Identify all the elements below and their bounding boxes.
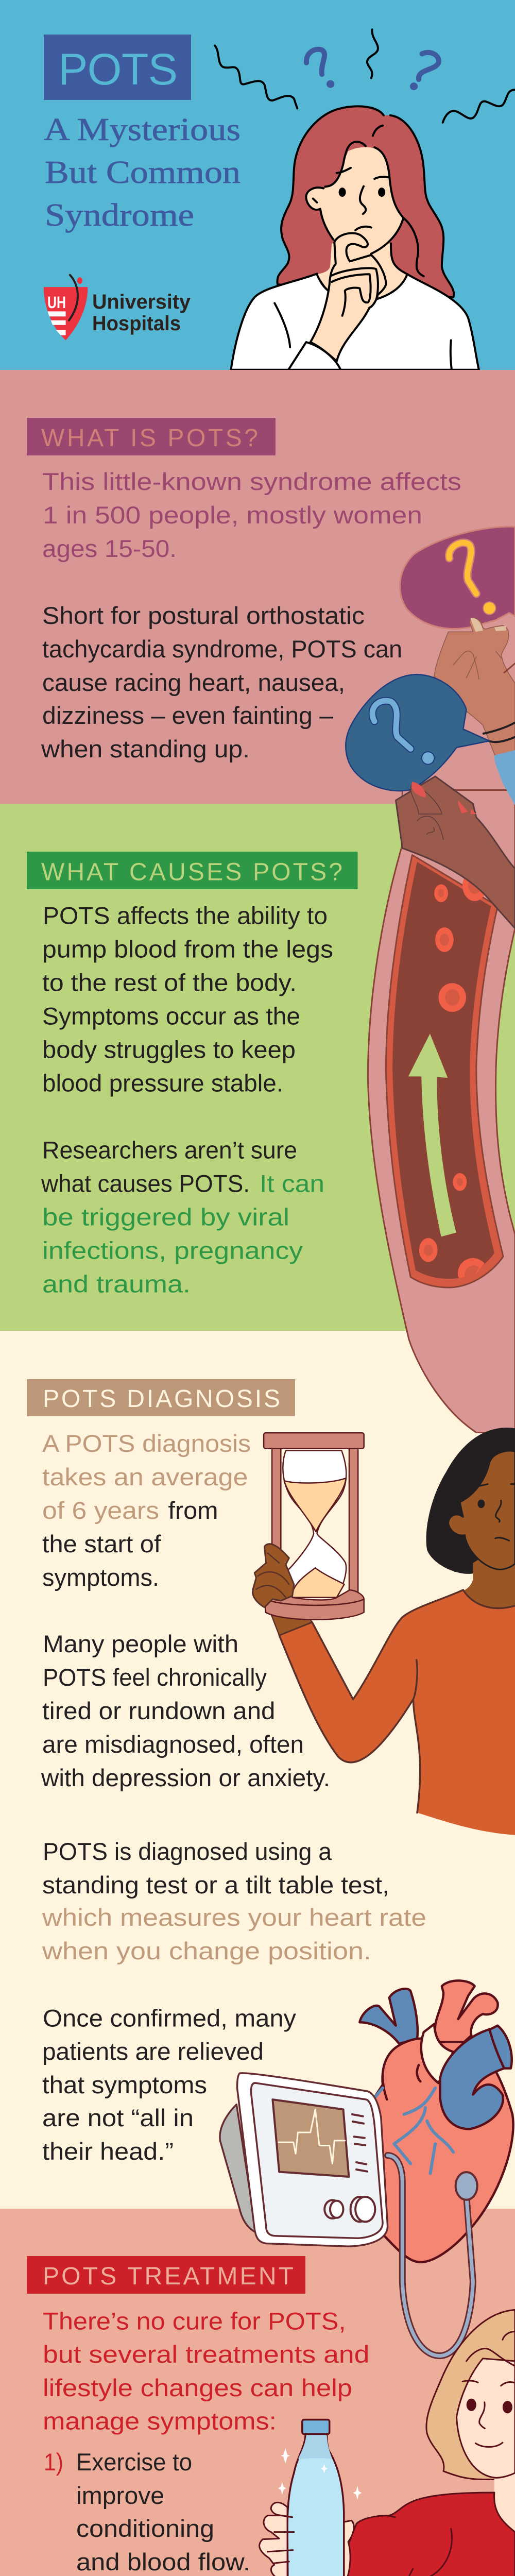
text block: relief after confirmation: patients are relieved (42, 2038, 264, 2065)
text block: what is POTS definition: dizziness – even fainting – (42, 702, 334, 729)
text block: what causes POTS explanation: pump blood from the legs (42, 936, 333, 962)
text block: average time to diagnosis: takes an average (42, 1463, 248, 1490)
text block: relief after confirmation: are not “all in (42, 2104, 194, 2131)
text block: what causes POTS explanation: Researchers aren’t sure (42, 1137, 297, 1163)
text block: misdiagnosis: POTS feel chronically (43, 1664, 267, 1691)
text block: what causes POTS explanation: what causes POTS. (41, 1170, 250, 1197)
text block: how POTS is tested: POTS is diagnosed using a (43, 1838, 332, 1865)
text block: average time to diagnosis: the start of (42, 1530, 161, 1557)
illustration: blood vessel with arrow (368, 776, 515, 1432)
text block: what is POTS intro: ages 15-50. (42, 535, 177, 562)
text block: average time to diagnosis: of 6 years (42, 1497, 159, 1524)
text block: misdiagnosis: are misdiagnosed, often (42, 1731, 304, 1758)
text block: misdiagnosis: Many people with (43, 1630, 238, 1657)
text block: how POTS is tested: when you change position. (42, 1937, 371, 1964)
title block: POTS (58, 45, 178, 94)
title block: But Common (45, 155, 241, 190)
text block: relief after confirmation: that symptoms (42, 2071, 207, 2098)
text block: what is POTS definition (41, 602, 402, 762)
heading: what causes POTS (27, 852, 357, 889)
text block: average time to diagnosis: from (168, 1497, 218, 1524)
panel background: POTS treatment (0, 2209, 515, 2576)
panel background: what is POTS (0, 370, 515, 804)
illustration: confused woman with question marks (215, 29, 515, 370)
heading: POTS treatment (27, 2256, 305, 2294)
text block: what causes POTS explanation: to the rest of the body. (42, 969, 297, 996)
list item 1: exercise: improve (76, 2482, 164, 2509)
logo: University Hospitals: University (92, 291, 191, 313)
illustration: woman holding hourglass (252, 1428, 515, 1835)
text block: how POTS is tested (42, 1838, 426, 1964)
text block: treatment intro: There’s no cure for POTS, (43, 2307, 346, 2335)
logo: University Hospitals: Hospitals (92, 312, 181, 335)
list item 1: exercise: and blood flow. (76, 2548, 250, 2575)
text block: relief after confirmation (42, 2004, 297, 2165)
title block: A Mysterious (44, 112, 241, 147)
text block: what causes POTS explanation: blood pressure stable. (42, 1070, 283, 1096)
title block: Syndrome (45, 198, 194, 233)
text block: what is POTS definition: tachycardia syndrome, POTS can (42, 635, 402, 663)
text block: POTS triggers (42, 1170, 324, 1297)
text block: what is POTS intro (42, 468, 461, 562)
text block: POTS triggers: and trauma. (42, 1270, 191, 1297)
text block: what is POTS definition: Short for postural orthostatic (42, 602, 365, 629)
list item 1: exercise: conditioning (76, 2515, 214, 2542)
text block: misdiagnosis: with depression or anxiety. (41, 1764, 330, 1791)
panel background: POTS diagnosis (0, 1331, 515, 2209)
text block: relief after confirmation: Once confirmed, many (43, 2004, 297, 2032)
list item 1: exercise: Exercise to (76, 2448, 192, 2476)
heading: POTS diagnosis: POTS DIAGNOSIS (43, 1385, 282, 1413)
logo: University Hospitals: UH (47, 293, 66, 312)
text block: treatment intro: but several treatments and (43, 2341, 370, 2368)
illustration: hands holding question mark speech bubbles (346, 527, 515, 814)
text block: treatment intro (43, 2307, 370, 2435)
text block: treatment intro: lifestyle changes can help (43, 2374, 352, 2401)
text block: POTS triggers: infections, pregnancy (42, 1236, 303, 1264)
logo: University Hospitals (44, 275, 191, 341)
text block: what is POTS intro: 1 in 500 people, mostly women (43, 501, 422, 529)
text block: POTS triggers: be triggered by viral (42, 1204, 289, 1230)
heading: what is POTS: WHAT IS POTS? (41, 425, 260, 452)
text block: misdiagnosis: tired or rundown and (42, 1697, 275, 1724)
text block: average time to diagnosis: symptoms. (42, 1564, 159, 1591)
text block: average time to diagnosis: A POTS diagnosis (42, 1430, 251, 1457)
illustration: woman holding water bottle (260, 2310, 515, 2576)
text block: what causes POTS explanation: POTS affects the ability to (43, 902, 328, 929)
heading: what is POTS (27, 418, 276, 455)
text block: relief after confirmation: their head.” (42, 2138, 174, 2165)
panel background: what causes POTS (0, 804, 515, 1331)
list item 1: exercise (44, 2448, 250, 2575)
title block (44, 35, 241, 233)
text block: average time to diagnosis (42, 1430, 251, 1591)
text block: treatment intro: manage symptoms: (43, 2407, 277, 2435)
text block: what causes POTS explanation (41, 902, 333, 1197)
heading: POTS diagnosis (27, 1379, 295, 1416)
text block: what causes POTS explanation: body struggles to keep (42, 1036, 296, 1063)
text block: how POTS is tested: which measures your heart rate (42, 1904, 426, 1931)
text block: misdiagnosis (41, 1630, 330, 1791)
text block: POTS triggers: It can (260, 1170, 324, 1197)
heading: what causes POTS: WHAT CAUSES POTS? (41, 858, 344, 886)
text block: what is POTS intro: This little-known syndrome affects (42, 468, 461, 495)
text block: how POTS is tested: standing test or a tilt table test, (42, 1871, 389, 1899)
list item 1: exercise: 1) (44, 2448, 63, 2476)
text block: what is POTS definition: when standing up. (41, 735, 250, 762)
illustration: heart with heart rate monitor (220, 1980, 513, 2356)
text block: what is POTS definition: cause racing heart, nausea, (42, 669, 345, 696)
text block: what causes POTS explanation: Symptoms occur as the (42, 1003, 300, 1029)
panel background: header (0, 0, 515, 370)
heading: POTS treatment: POTS TREATMENT (43, 2263, 295, 2290)
